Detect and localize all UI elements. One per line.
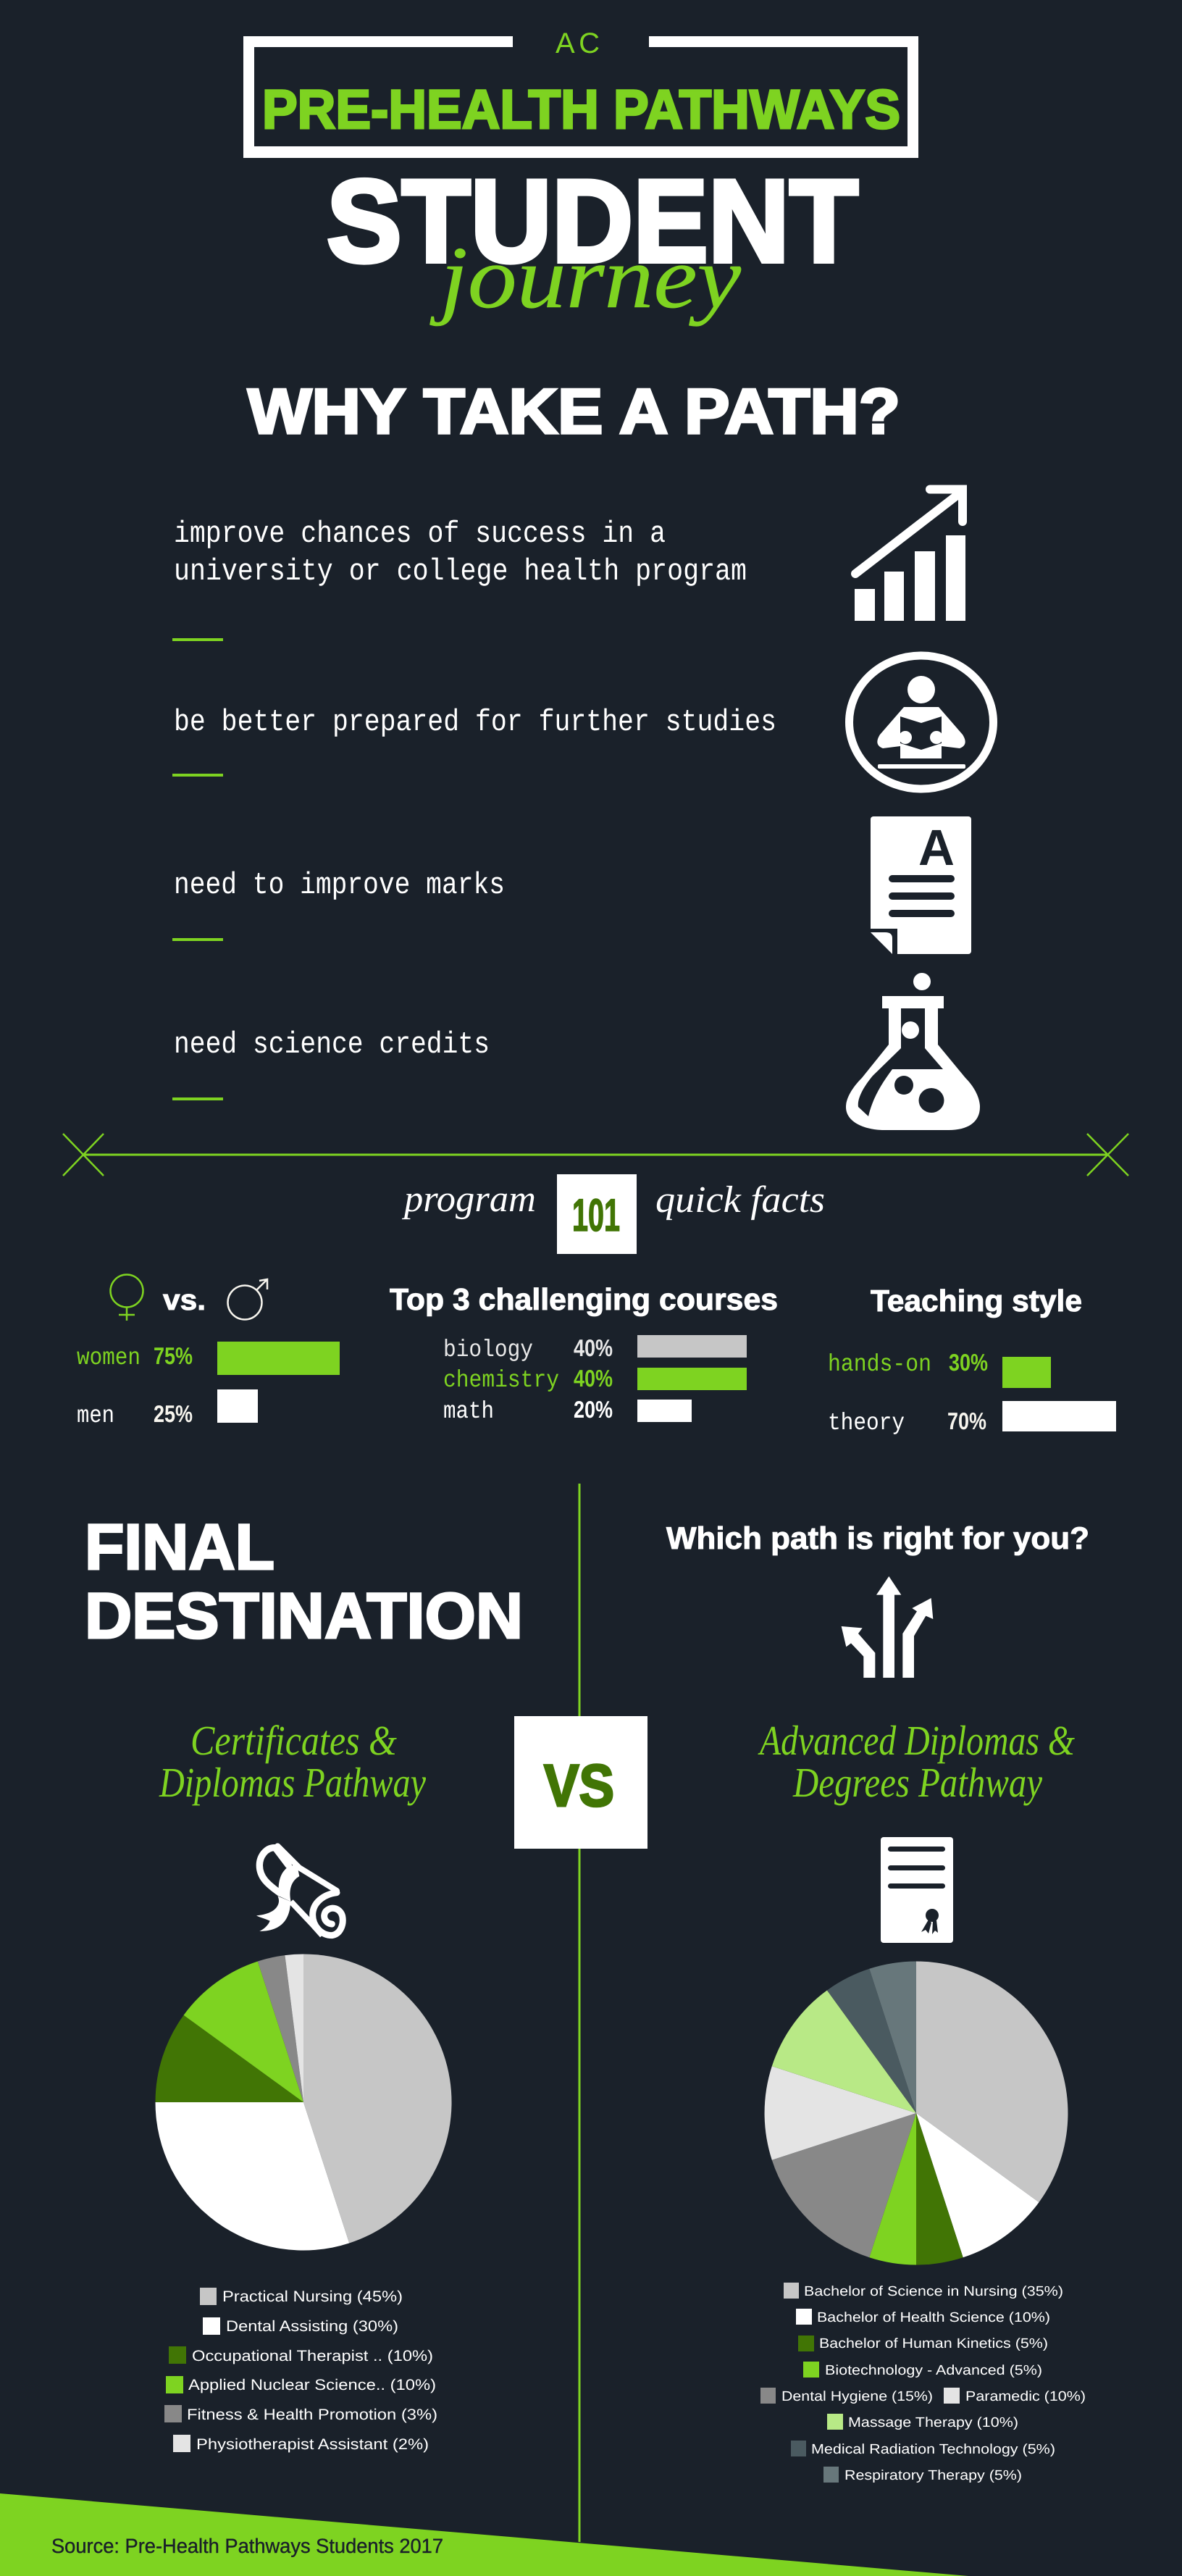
heading: top 3 courses: Top 3 challenging courses: [390, 1282, 778, 1316]
legend: degrees: Paramedic (10%): [965, 2389, 1086, 2404]
pie chart: certificates: [155, 1954, 452, 2251]
panel: certificates and diplomas pathway: [155, 1717, 452, 2453]
legend: degrees: Massage Therapy (10%): [848, 2415, 1018, 2430]
heading: teaching style: Teaching style: [871, 1284, 1082, 1318]
header: title lockup: [243, 28, 918, 327]
reason 3 text: [172, 868, 505, 941]
icon: diploma scroll: [256, 1846, 343, 1936]
badge: 101: 101: [572, 1190, 620, 1241]
legend: degrees: Bachelor of Health Science (10%): [817, 2310, 1050, 2325]
pathway title: Advanced Diplomas &: [758, 1717, 1075, 1764]
bar row: theory: 70%: [947, 1408, 986, 1434]
reason 1 text: university or college health program: [174, 554, 747, 589]
legend: certificates: Fitness & Health Promotion (3%): [187, 2406, 437, 2423]
reason 4 text: need science credits: [174, 1027, 490, 1062]
legend: certificates: Dental Assisting (30%): [226, 2318, 398, 2335]
icon: male symbol: [227, 1279, 267, 1320]
title frame: [243, 36, 918, 158]
legend: degrees: Medical Radiation Technology (5%): [811, 2442, 1055, 2457]
reason 2 text: be better prepared for further studies: [174, 705, 776, 740]
bar row: men: 25%: [154, 1400, 193, 1427]
panel: teaching style: [828, 1284, 1116, 1437]
heading: final destination: FINAL: [85, 1510, 274, 1583]
bar row: men: men: [77, 1402, 114, 1429]
bar row: biology: 40%: [574, 1334, 613, 1361]
panel: gender split: [77, 1275, 340, 1429]
panel: advanced diplomas and degrees pathway: [758, 1717, 1086, 2483]
heading: program 101 quick facts: [401, 1174, 825, 1254]
bar row: biology: biology: [443, 1337, 533, 1363]
pathway title: Diplomas Pathway: [159, 1759, 426, 1806]
subtitle: journey: journey: [429, 229, 742, 327]
legend: degrees: Respiratory Therapy (5%): [844, 2468, 1022, 2483]
pathway title: Degrees Pathway: [792, 1759, 1042, 1806]
title: pre-health pathways: PRE-HEALTH PATHWAYS: [262, 79, 900, 141]
source note: Source: Pre-Health Pathways Students 2017: [51, 2535, 443, 2557]
bar row: chemistry: 40%: [574, 1365, 613, 1392]
heading: final destination: DESTINATION: [85, 1579, 523, 1652]
bar row: math: math: [443, 1398, 494, 1425]
icon: flask: [846, 973, 980, 1130]
icon: graded paper: [870, 816, 971, 955]
legend: degrees: Biotechnology - Advanced (5%): [825, 2363, 1042, 2378]
legend: certificates: Occupational Therapist .. (10%): [192, 2348, 433, 2364]
bar row: chemistry: [443, 1365, 747, 1394]
reason 1 text: improve chances of success in a: [174, 517, 666, 551]
centre divider line: [578, 1484, 581, 2542]
organisation initials: AC: [556, 28, 600, 59]
bar row: math: [443, 1396, 692, 1425]
title: student: STUDENT: [327, 156, 858, 287]
heading: vs.: vs.: [163, 1284, 206, 1316]
bar row: hands-on: hands-on: [828, 1351, 931, 1378]
bar row: women: women: [77, 1345, 141, 1371]
icon: certificate: [881, 1837, 953, 1943]
legend: degrees: Bachelor of Science in Nursing (35%): [804, 2284, 1063, 2299]
footer: green wedge with source: [0, 2493, 968, 2576]
badge: 101: [557, 1174, 637, 1254]
label: quick facts: quick facts: [655, 1179, 825, 1221]
pathway title: [159, 1717, 426, 1806]
pathway title: [758, 1717, 1075, 1806]
bar row: chemistry: chemistry: [443, 1367, 559, 1394]
bar row: biology: [443, 1334, 747, 1363]
icon: female symbol: [110, 1275, 143, 1321]
heading: why take a path: WHY TAKE A PATH?: [248, 375, 900, 447]
reason 4 text: [172, 1027, 490, 1100]
icon: graded paper: A: [918, 819, 955, 876]
label: program: program: [401, 1179, 536, 1220]
legend: degrees: Bachelor of Human Kinetics (5%): [819, 2336, 1048, 2351]
bar row: hands-on: 30%: [949, 1349, 988, 1376]
pathway title: Certificates &: [190, 1717, 397, 1764]
section divider with crossed ends: [63, 1134, 1128, 1176]
legend: certificates: Practical Nursing (45%): [222, 2288, 403, 2305]
pie chart: degrees: [765, 1962, 1068, 2265]
legend: degrees: Dental Hygiene (15%): [781, 2389, 933, 2404]
bar row: women: 75%: [154, 1342, 193, 1369]
icon: three-way arrows: [842, 1576, 933, 1678]
bar row: math: 20%: [574, 1396, 613, 1423]
legend: certificates: [164, 2288, 437, 2453]
bar row: men: [77, 1389, 258, 1429]
reason 2 text: [172, 705, 776, 777]
bar row: theory: [828, 1401, 1116, 1437]
badge: VS: [514, 1716, 647, 1849]
panel: top 3 challenging courses: [390, 1282, 778, 1425]
heading: final destination: [85, 1510, 523, 1652]
reason 3 text: need to improve marks: [174, 868, 505, 903]
legend: certificates: Physiotherapist Assistant (2%): [196, 2436, 429, 2453]
bar row: women: [77, 1342, 340, 1375]
heading: which path: Which path is right for you?: [666, 1521, 1089, 1556]
icon: rising bar chart: [855, 490, 965, 621]
bar row: hands-on: [828, 1349, 1051, 1388]
legend: degrees: [760, 2283, 1086, 2483]
legend: certificates: Applied Nuclear Science.. (10%): [188, 2377, 436, 2393]
panel: reasons list: [172, 490, 994, 1130]
icon: person reading: [849, 656, 994, 789]
reason 1 text: [172, 517, 747, 641]
bar row: theory: theory: [828, 1410, 905, 1437]
badge: VS: VS: [544, 1753, 614, 1819]
